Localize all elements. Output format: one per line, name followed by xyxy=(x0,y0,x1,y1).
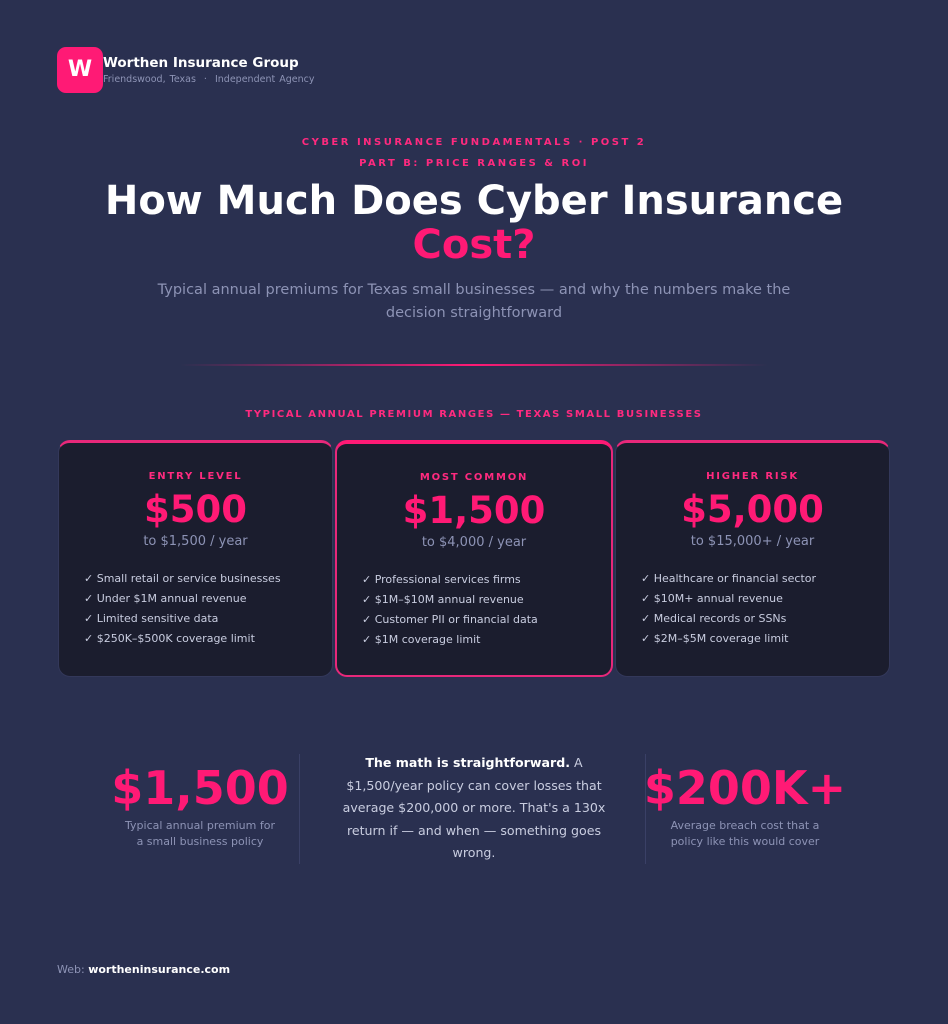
card: entry level: ✓ Under $1M annual revenue xyxy=(84,592,246,605)
card: entry level: ENTRY LEVEL xyxy=(149,471,242,482)
card: entry level: ✓ Small retail or service businesses xyxy=(84,572,281,585)
card: most common: $1,500 xyxy=(403,489,545,532)
title: How Much Does Cyber Insurance xyxy=(105,178,843,224)
stat: premium: a small business policy xyxy=(137,835,263,848)
card: entry level xyxy=(58,440,333,677)
brand name: Worthen Insurance Group xyxy=(103,55,299,71)
eyebrow: CYBER INSURANCE FUNDAMENTALS · POST 2 xyxy=(302,137,646,148)
stat: breach cost: policy like this would cover xyxy=(671,835,819,848)
card: entry level: to $1,500 / year xyxy=(143,534,248,549)
card: entry level: ✓ $250K–$500K coverage limit xyxy=(84,632,255,645)
card: higher risk: to $15,000+ / year xyxy=(691,534,814,549)
card: most common: MOST COMMON xyxy=(420,472,528,483)
card: most common: ✓ Customer PII or financial data xyxy=(362,613,538,626)
card: most common: ✓ Professional services firms xyxy=(362,573,521,586)
math explanation: The math is straightforward. A $1,500/year policy can cover losses that average $200,000 or more. That's a 130x return if — and when — something goes wrong. xyxy=(343,755,605,860)
logo: W xyxy=(68,57,92,82)
title: Cost? xyxy=(413,222,535,268)
stat: premium: Typical annual premium for xyxy=(125,819,275,832)
card: entry level: $500 xyxy=(144,488,247,531)
eyebrow xyxy=(302,137,646,169)
logo xyxy=(57,47,103,93)
stat: breach cost: Average breach cost that a xyxy=(671,819,819,832)
card: most common: ✓ $1M–$10M annual revenue xyxy=(362,593,524,606)
stat: breach cost xyxy=(644,761,846,848)
card: higher risk: ✓ $10M+ annual revenue xyxy=(641,592,783,605)
card: entry level: ✓ Limited sensitive data xyxy=(84,612,218,625)
card: most common: ✓ $1M coverage limit xyxy=(362,633,480,646)
stat: premium: $1,500 xyxy=(111,761,289,815)
section heading: TYPICAL ANNUAL PREMIUM RANGES — TEXAS SMALL BUSINESSES xyxy=(245,409,703,420)
brand name xyxy=(103,55,314,85)
stat: breach cost: $200K+ xyxy=(644,761,846,815)
card: higher risk xyxy=(615,440,890,677)
card: higher risk: ✓ Medical records or SSNs xyxy=(641,612,786,625)
brand name: Friendswood, Texas · Independent Agency xyxy=(103,74,314,85)
card: higher risk: ✓ $2M–$5M coverage limit xyxy=(641,632,788,645)
card: higher risk: ✓ Healthcare or financial sector xyxy=(641,572,816,585)
subtitle: Typical annual premiums for Texas small businesses — and why the numbers make the decision straightforward xyxy=(158,282,790,321)
stat: premium xyxy=(111,761,289,848)
card: higher risk: HIGHER RISK xyxy=(706,471,799,482)
card: higher risk: $5,000 xyxy=(681,488,824,531)
eyebrow: PART B: PRICE RANGES & ROI xyxy=(359,158,589,169)
footer: Web: wortheninsurance.com xyxy=(57,963,230,976)
card: most common xyxy=(335,440,613,677)
title xyxy=(105,178,843,268)
card: most common: to $4,000 / year xyxy=(422,535,526,550)
